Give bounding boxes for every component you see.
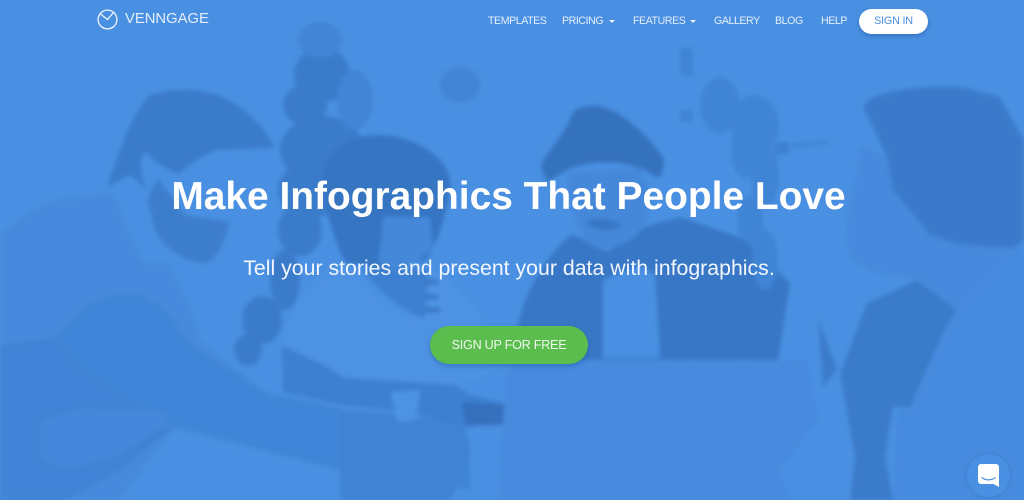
top-right plant [700, 77, 779, 290]
hat [541, 106, 664, 182]
brand name: VENNGAGE [125, 11, 209, 27]
middle woman face [378, 217, 433, 272]
middle woman arms [282, 345, 505, 428]
laptop lid [498, 360, 818, 500]
nav: pricing: PRICING [562, 15, 603, 27]
right woman face and neck [846, 145, 1013, 310]
left man lower body shade [0, 337, 173, 500]
hand with cup [340, 410, 470, 500]
sign in button [859, 9, 928, 34]
icon: clock circle [97, 10, 118, 30]
nav: templates: TEMPLATES [488, 15, 546, 27]
right woman sweater [893, 240, 1024, 500]
sign up button: SIGN UP FOR FREE [452, 338, 566, 352]
middle woman chest [362, 268, 428, 318]
plant left [234, 47, 364, 366]
middle woman sweater [282, 262, 495, 385]
left man beard [147, 178, 230, 263]
left man hair [107, 90, 274, 192]
icon: chat bubble [978, 464, 999, 487]
nav: gallery: GALLERY [714, 15, 760, 27]
hat man jacket [515, 217, 790, 360]
right woman hair top [863, 87, 1024, 248]
sign up button [430, 326, 588, 364]
subheading: Tell your stories and present your data with infographics. [243, 256, 775, 280]
small hair piece beside arm [818, 317, 837, 387]
left man hand [40, 408, 165, 470]
sign in button: SIGN IN [874, 15, 913, 27]
headline: Make Infographics That People Love [171, 175, 846, 218]
nav: features: FEATURES [633, 15, 685, 27]
middle woman hair [324, 135, 450, 270]
hat man face [567, 168, 652, 248]
nav: blog: BLOG [775, 15, 803, 27]
left man shirt [0, 193, 340, 500]
sweater stripes [425, 282, 440, 310]
logo [97, 10, 209, 30]
left man arm [57, 293, 470, 490]
right woman long hair [840, 280, 957, 500]
nav: help: HELP [821, 15, 847, 27]
chat widget [967, 454, 1010, 497]
navigation bar [488, 9, 930, 38]
